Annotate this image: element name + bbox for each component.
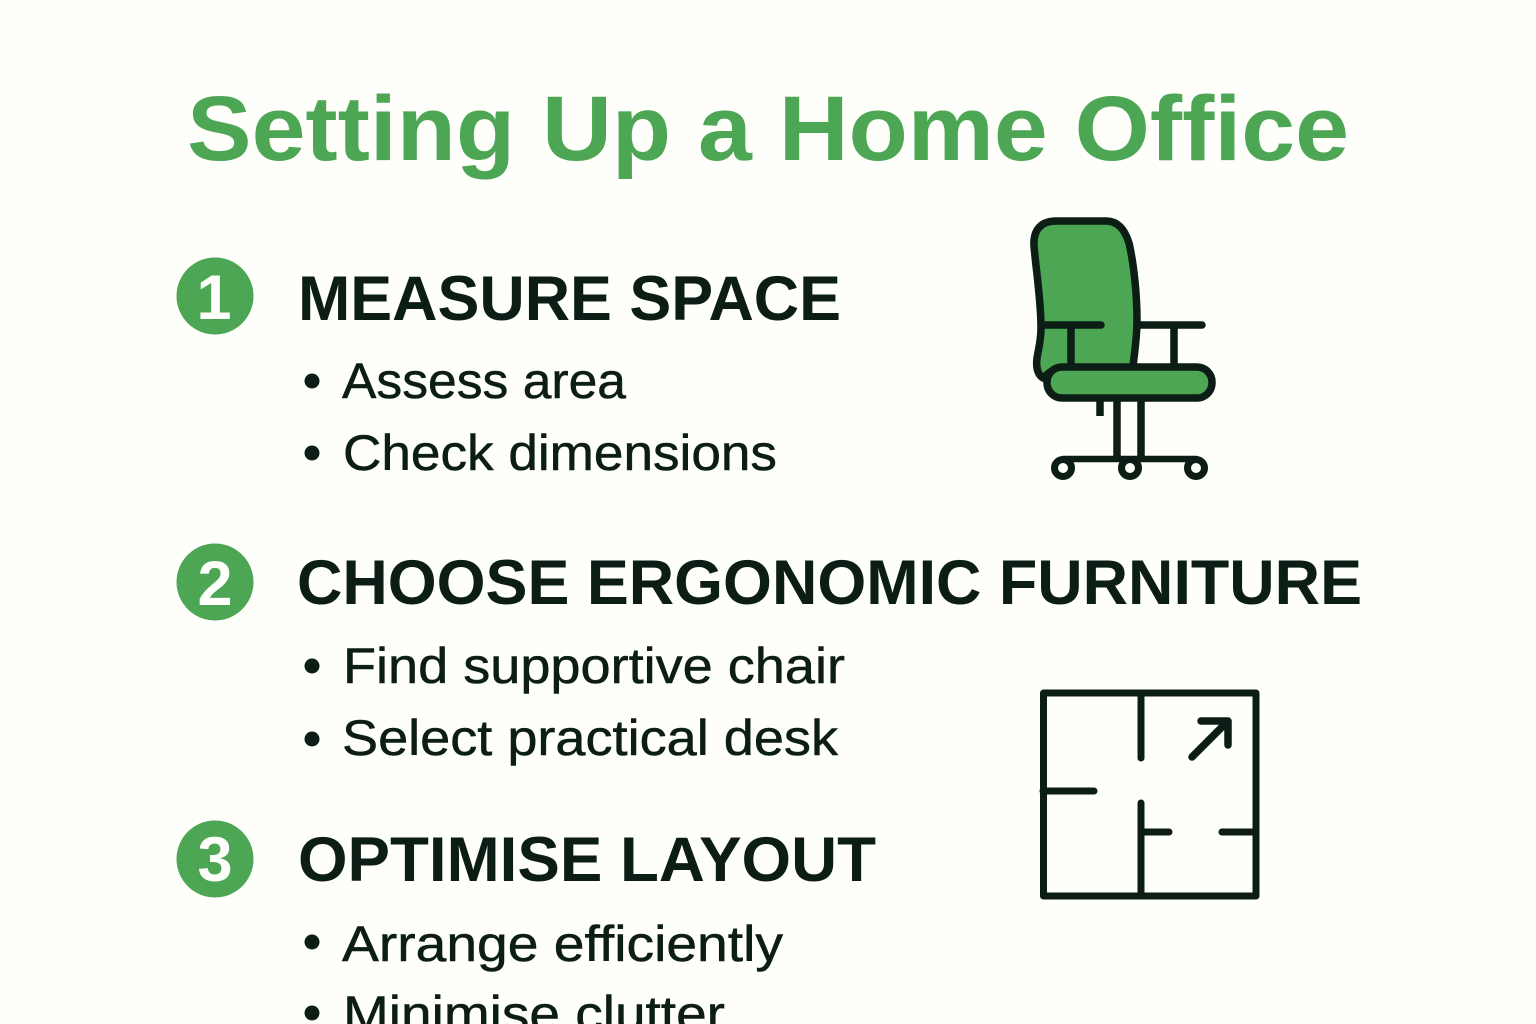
- chair stems: [1100, 398, 1141, 459]
- number badge 2: [176, 544, 254, 620]
- floor plan outer wall: [1044, 693, 1256, 896]
- chair seat: [1047, 367, 1212, 398]
- chair wheels: [1054, 460, 1204, 476]
- bullet: find supportive chair: Find supportive chair: [343, 638, 845, 694]
- bullet: check dimensions: Check dimensions: [343, 425, 777, 481]
- heading: optimise layout: OPTIMISE LAYOUT: [298, 825, 876, 895]
- floor plan arrow: [1192, 721, 1228, 757]
- panel: step 1 measure space: [176, 258, 841, 481]
- number badge 3: 3: [197, 825, 233, 895]
- number badge 1: 1: [196, 263, 232, 333]
- left armrest: [1041, 325, 1101, 367]
- floor plan inner walls: [1043, 693, 1256, 896]
- icon: office chair: [1034, 221, 1212, 476]
- bullet: select practical desk: Select practical desk: [342, 710, 839, 766]
- number badge 3: [176, 820, 254, 898]
- heading: choose ergonomic furniture: CHOOSE ERGONOMIC FURNITURE: [297, 548, 1362, 618]
- panel: step 2 choose ergonomic furniture: [176, 544, 1362, 766]
- panel: step 3 optimise layout: [176, 820, 876, 1024]
- number badge 1: [176, 258, 254, 334]
- bullet: arrange efficiently: Arrange efficiently: [342, 916, 783, 972]
- chair back: [1034, 221, 1137, 378]
- icon: floor plan with arrow: [1043, 693, 1256, 896]
- title: Setting Up a Home Office: [187, 78, 1349, 180]
- chair base: [1063, 456, 1196, 462]
- bullet: assess area: Assess area: [342, 353, 626, 409]
- number badge 2: 2: [197, 549, 233, 619]
- right armrest: [1140, 325, 1202, 367]
- heading: measure space: MEASURE SPACE: [298, 264, 841, 334]
